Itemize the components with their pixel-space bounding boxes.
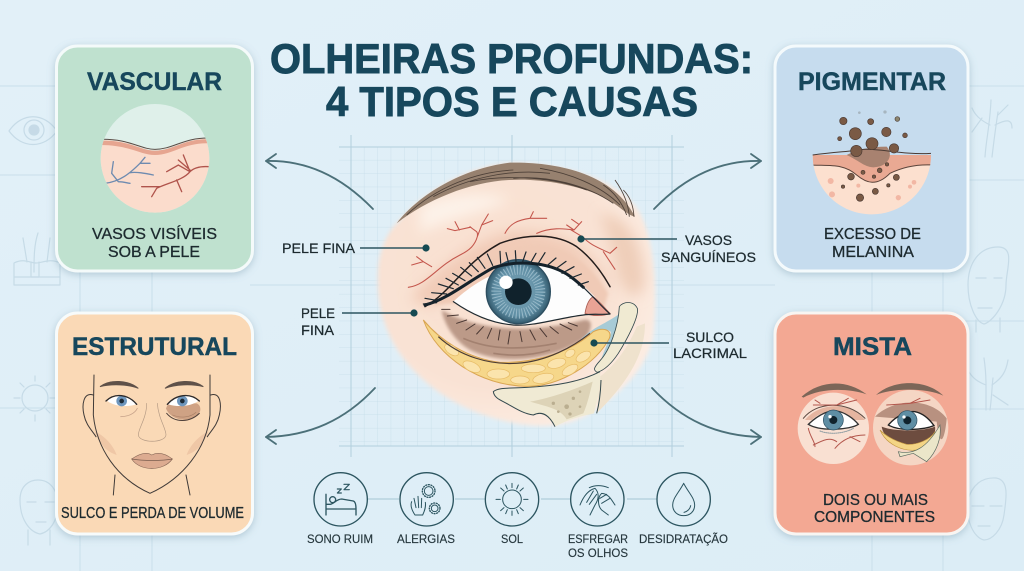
cheek beige [597, 323, 645, 413]
icon: esfregar os olhos [571, 473, 624, 526]
text: pigmentar description: MELANINA [832, 244, 914, 261]
label: sol: SOL [501, 532, 523, 546]
caruncle [585, 297, 610, 316]
under eye outline [438, 333, 590, 364]
title: OLHEIRAS PROFUNDAS: [270, 35, 753, 82]
arrow: to vascular [266, 154, 373, 209]
background icon: tree top right [972, 100, 1012, 157]
text: vascular description: VASOS VISÍVEIS [92, 224, 217, 243]
label: esfregar os olhos [568, 532, 628, 560]
callout: pele fina lower: PELE [301, 305, 335, 321]
highlight [499, 276, 513, 289]
callout: vasos sanguineos [577, 232, 756, 265]
callout: pele fina lower [301, 305, 418, 338]
background icon: sun [14, 376, 56, 421]
icon: desidratacao [657, 473, 710, 526]
upper lashes [423, 251, 588, 304]
callout: sulco lacrimal: SULCO [686, 329, 734, 345]
fat pad [423, 320, 610, 386]
upper crease line [425, 236, 610, 307]
orbital bone upper [595, 302, 638, 372]
icon: skin with veins [100, 104, 210, 217]
skin [378, 163, 655, 426]
text: mista description: DOIS OU MAIS [823, 492, 928, 509]
background icon: tree lower right [968, 358, 1008, 410]
icon: sono ruim [314, 473, 367, 526]
label: esfregar os olhos: ESFREGAR [568, 532, 628, 546]
label: esfregar os olhos: OS OLHOS [568, 546, 628, 560]
eyebrow [397, 163, 635, 223]
callout: pele fina top [282, 240, 430, 256]
icon: two eyes [798, 383, 948, 465]
iris [486, 260, 550, 324]
text: pigmentar description: EXCESSO DE [824, 226, 921, 243]
background icon: eye [9, 117, 57, 144]
callout: vasos sanguineos: VASOS [685, 232, 732, 248]
text: pigmentar description [824, 226, 921, 261]
lower orbital bone [493, 372, 601, 427]
iris fibres [496, 270, 540, 314]
callout: pele fina top: PELE FINA [282, 240, 356, 256]
label: sono ruim: SONO RUIM [307, 532, 373, 546]
heading: mista: MISTA [833, 333, 912, 361]
arrow: to mista [652, 388, 761, 444]
text: mista description: COMPONENTES [814, 509, 935, 526]
background icon: skin section [14, 233, 60, 285]
title [270, 35, 753, 125]
dark circle under eye [442, 310, 591, 359]
callout: sulco lacrimal [590, 329, 747, 361]
lower lashes [442, 309, 577, 344]
central eye anatomy illustration [378, 163, 655, 427]
heading: pigmentar: PIGMENTAR [798, 68, 946, 96]
background icon: face right [968, 247, 1009, 332]
icon: face [83, 375, 220, 495]
arrow: to pigmentar [654, 154, 761, 209]
icon: alergias [400, 473, 453, 526]
panel: mista [775, 313, 968, 534]
pupil [505, 278, 532, 305]
arrow: to estrutural [266, 388, 375, 444]
text: estrutural description: SULCO E PERDA DE VOLUME [61, 505, 244, 522]
upper eyelid [433, 245, 608, 310]
title: 4 TIPOS E CAUSAS [326, 78, 698, 125]
blood vessels [408, 212, 617, 287]
text: vascular description [92, 224, 217, 261]
panel: estrutural [56, 313, 252, 534]
icon: sol [485, 473, 539, 526]
under eye creases [463, 338, 557, 355]
label: alergias: ALERGIAS [397, 532, 455, 546]
central grid [339, 135, 684, 457]
callout: pele fina lower: FINA [301, 322, 335, 338]
sclera [453, 265, 610, 325]
causes row [307, 473, 728, 560]
callout: vasos sanguineos: SANGUÍNEOS [661, 249, 756, 265]
background icon: face left [20, 480, 58, 545]
text: mista description [814, 492, 935, 526]
panel: pigmentar [775, 46, 968, 271]
tear trough blue [580, 313, 620, 363]
lid lines [425, 263, 610, 325]
background icon: face lower right [967, 478, 1006, 540]
callout: sulco lacrimal: LACRIMAL [673, 345, 747, 361]
heading: estrutural: ESTRUTURAL [72, 333, 237, 361]
text: vascular description: SOB A PELE [108, 244, 200, 261]
heading: vascular: VASCULAR [87, 68, 222, 96]
skin shading [410, 194, 645, 307]
icon: melanin skin [810, 110, 933, 214]
label: desidratacao: DESIDRATAÇÃO [639, 532, 728, 546]
panel: vascular [56, 46, 252, 271]
